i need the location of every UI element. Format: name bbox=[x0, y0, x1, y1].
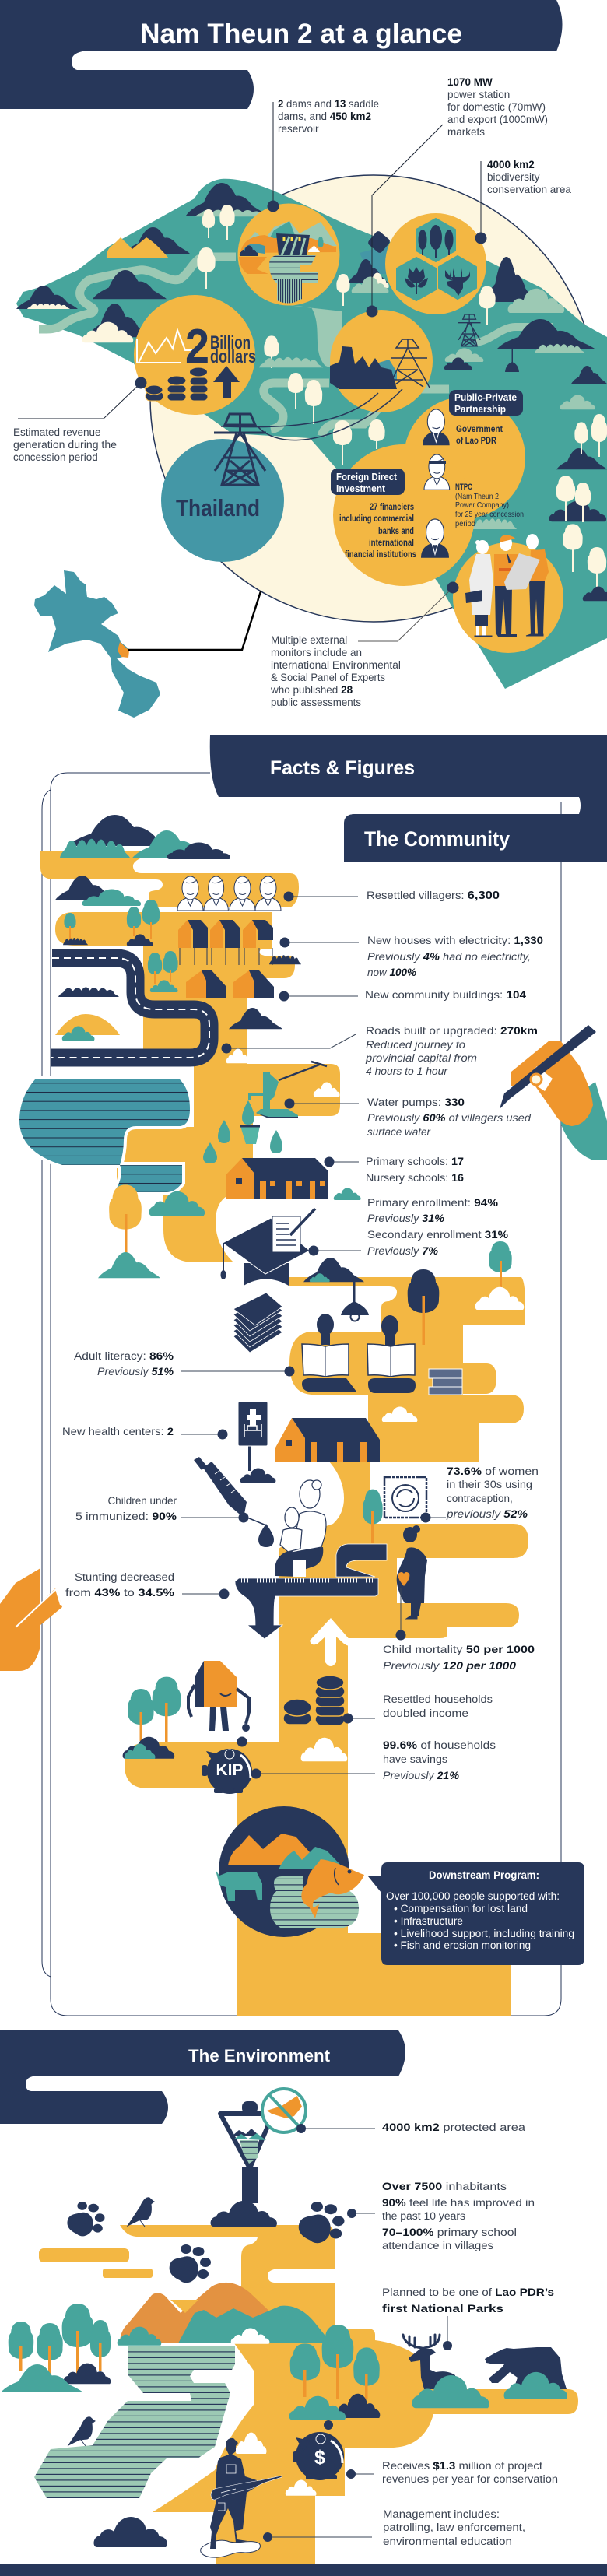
financiers label: banks and bbox=[378, 525, 414, 536]
icon: white cloud and leader line bbox=[301, 1738, 347, 1761]
icon: plan sheet bbox=[504, 553, 540, 590]
circle: downstream scene bbox=[216, 1806, 364, 1937]
NTPC label: (Nam Theun 2 bbox=[455, 492, 499, 501]
environment text: inhabitants: Over 7500 inhabitants bbox=[382, 2181, 496, 2192]
community text: water pumps: Water pumps: 330 bbox=[367, 1097, 462, 1108]
community text: roads: Roads built or upgraded: 270km bbox=[366, 1025, 533, 1037]
title: Nam Theun 2 at a glance bbox=[140, 19, 462, 49]
scenery: mountain, lamp and trees above readers bbox=[304, 1241, 524, 1345]
callout: downstream program bbox=[368, 1862, 584, 1965]
community text: stunting: Stunting decreased bbox=[75, 1571, 174, 1583]
community leader lines and dots bbox=[181, 892, 446, 1774]
circle: dams and reservoir bbox=[238, 204, 339, 305]
text: revenue: generation during the bbox=[13, 439, 117, 451]
road bbox=[51, 958, 209, 1058]
icon: tape measure bbox=[235, 1544, 387, 1639]
community text: electricity: New houses with electricity: 1,330 bbox=[367, 935, 540, 946]
community text: enrollment: Primary enrollment: 94% bbox=[367, 1197, 495, 1209]
footer bar bbox=[0, 2564, 607, 2576]
icon: deer head bbox=[445, 268, 470, 296]
community text: savings: Previously 21% bbox=[383, 1770, 458, 1781]
financiers label: financial institutions bbox=[345, 549, 416, 560]
community text: adult literacy: Previously 51% bbox=[97, 1366, 173, 1377]
striped river bbox=[34, 2346, 235, 2498]
icon: fish bbox=[301, 1859, 364, 1918]
government label bbox=[456, 423, 503, 446]
text: power station: power station bbox=[447, 89, 510, 100]
community text: contraception: contraception, bbox=[447, 1493, 513, 1504]
text: biodiversity: biodiversity bbox=[487, 171, 540, 183]
icon: KIP piggy bank bbox=[202, 1737, 261, 1794]
icon: stack of paper bbox=[233, 1293, 282, 1353]
community text: roads: 4 hours to 1 hour bbox=[366, 1065, 448, 1077]
trees centre bbox=[289, 2325, 380, 2420]
text: biodiversity: conservation area bbox=[487, 184, 571, 195]
text: power station: and export (1000mW) bbox=[447, 114, 548, 125]
environment text: national parks: first National Parks bbox=[382, 2303, 503, 2315]
circle: foreign direct investment bbox=[333, 444, 524, 586]
community text: electricity: now 100% bbox=[367, 967, 416, 978]
text: power station: markets bbox=[447, 126, 485, 138]
icon: up arrow bbox=[213, 366, 240, 398]
icon: mother and child bbox=[275, 1480, 326, 1577]
icon: cow bbox=[216, 1870, 262, 1901]
icon: small clouds near ranger bbox=[94, 2433, 317, 2547]
icon: woman in lab coat bbox=[465, 540, 493, 637]
community text: adult literacy: Adult literacy: 86% bbox=[74, 1350, 170, 1362]
trees left bbox=[1, 2304, 111, 2392]
icon: large pylon bbox=[214, 414, 266, 485]
community text: water pumps: Previously 60% of villagers used bbox=[367, 1112, 525, 1124]
icon: adults reading bbox=[302, 1314, 416, 1393]
environment text: management: Management includes: bbox=[383, 2508, 500, 2520]
community text: immunized: 5 immunized: 90% bbox=[75, 1511, 173, 1522]
financiers label bbox=[339, 501, 416, 560]
community text: contraception: in their 30s using bbox=[447, 1479, 532, 1490]
environment yellow ribbon bbox=[39, 2225, 578, 2564]
text: external monitors: & Social Panel of Experts bbox=[271, 672, 385, 683]
badge: public-private partnership bbox=[449, 390, 523, 416]
text: external monitors: who published 28 bbox=[271, 684, 353, 696]
clouds under animals bbox=[412, 2372, 567, 2408]
community text: income: Resettled households bbox=[383, 1693, 493, 1705]
icon: protected area sign bbox=[211, 2089, 306, 2227]
icon: white cloud bbox=[382, 1406, 417, 1422]
scenery: trees by houses bbox=[58, 900, 301, 1041]
icon: graduation cap with document bbox=[221, 1209, 315, 1286]
icon: hand holding pencil bbox=[500, 1025, 607, 1160]
scenery: mountains at top of community bbox=[55, 815, 230, 906]
circle: external monitors bbox=[453, 534, 563, 653]
circle: Thailand bbox=[161, 439, 284, 562]
community text: health centers: New health centers: 2 bbox=[62, 1426, 174, 1437]
map: Laos with project location bbox=[34, 570, 261, 718]
environment text: protected area: 4000 km2 protected area bbox=[382, 2122, 526, 2133]
community text: resettled villagers: Resettled villagers: 6,300 bbox=[367, 889, 500, 902]
badge: public-private partnership: Partnership bbox=[454, 403, 506, 415]
map scenery: rivers, mountains, trees bbox=[16, 183, 607, 601]
icon: no-touch symbol bbox=[262, 2089, 306, 2132]
text: revenue: concession period bbox=[13, 451, 98, 463]
callout: downstream program: • Compensation for lost land bbox=[394, 1903, 528, 1914]
small scene in sign bbox=[233, 2129, 266, 2164]
icon: syringe bbox=[194, 1457, 274, 1547]
icon: bear bbox=[485, 2347, 567, 2389]
circle: revenue two billion dollars: 2 bbox=[185, 320, 209, 374]
heading banner: the environment bbox=[0, 2030, 405, 2124]
heading: the community bbox=[344, 814, 607, 862]
environment leader lines and dots bbox=[263, 2124, 452, 2542]
icon: coin stacks bbox=[283, 1676, 353, 1725]
icon: park ranger bbox=[201, 2438, 282, 2557]
environment text: revenues: Receives $1.3 million of project bbox=[382, 2460, 535, 2472]
icon: smiling house figure bbox=[188, 1661, 250, 1732]
circle: Thailand: Thailand bbox=[176, 494, 260, 521]
icon: coins bbox=[146, 367, 208, 401]
icon: white up arrow bbox=[310, 1618, 352, 1666]
community text: schools: Primary schools: 17 bbox=[366, 1156, 463, 1167]
icon: health sign bbox=[238, 1402, 275, 1483]
community text: roads: provincial capital from bbox=[365, 1052, 477, 1064]
environment text: inhabitants: 70–100% primary school bbox=[382, 2227, 505, 2238]
icon: water pump bbox=[248, 1062, 340, 1118]
icon: row of new houses bbox=[178, 920, 273, 965]
environment text: revenues: revenues per year for conservation bbox=[382, 2473, 558, 2485]
icon: flower bbox=[405, 267, 428, 294]
government label: Government bbox=[456, 423, 503, 434]
community text: buildings: New community buildings: 104 bbox=[365, 989, 527, 1001]
community text: roads: Reduced journey to bbox=[366, 1039, 466, 1051]
icon: health center building bbox=[275, 1418, 380, 1462]
icon: dollar piggy bank: $ bbox=[314, 2447, 325, 2469]
community text: enrollment: Previously 31% bbox=[367, 1213, 443, 1224]
icon: deer bbox=[403, 2335, 455, 2389]
icon: KIP piggy bank: KIP bbox=[216, 1761, 244, 1779]
community text: savings: 99.6% of households bbox=[383, 1739, 486, 1751]
community text: stunting: from 43% to 34.5% bbox=[65, 1587, 168, 1599]
circle: biodiversity conservation bbox=[385, 213, 486, 314]
icon: tree and contraception packet bbox=[363, 1477, 426, 1543]
icon: small pylon bbox=[458, 314, 481, 346]
icon: financier bust bbox=[421, 519, 449, 558]
community text: child mortality: Child mortality 50 per 1000 bbox=[383, 1644, 523, 1655]
panel: teal map of the project area bbox=[16, 179, 607, 689]
text: dams: dams, and 450 km2 bbox=[278, 111, 371, 122]
text: external monitors: public assessments bbox=[271, 697, 361, 708]
text: power station: 1070 MW bbox=[447, 76, 493, 88]
icon: dollar piggy bank bbox=[293, 2432, 344, 2480]
community text: child mortality: Previously 120 per 1000 bbox=[383, 1660, 506, 1672]
text: biodiversity: 4000 km2 bbox=[487, 159, 535, 170]
badge: foreign direct investment: Foreign Direct bbox=[336, 471, 398, 483]
scenery: tree and clouds by school bbox=[98, 1184, 205, 1278]
financiers label: including commercial bbox=[339, 513, 414, 524]
icons: water drops and bucket bbox=[203, 1100, 282, 1163]
circle: power station bbox=[330, 310, 433, 412]
community text: electricity: Previously 4% had no electricity, bbox=[367, 951, 524, 963]
community text: immunized: Children under bbox=[107, 1495, 177, 1507]
callout: downstream program: • Infrastructure bbox=[394, 1915, 463, 1927]
text: dams: reservoir bbox=[278, 123, 319, 135]
financiers label: international bbox=[369, 537, 414, 548]
icon: left hand bbox=[0, 1568, 62, 1671]
callout: downstream program: Over 100,000 people supported with: bbox=[386, 1890, 560, 1902]
badge: public-private partnership: Public-Private bbox=[454, 391, 517, 403]
panel: cream backdrop circle bbox=[150, 175, 597, 622]
text: external monitors: monitors include an bbox=[271, 647, 362, 658]
lake: striped water bbox=[19, 1079, 190, 1192]
circle: revenue two billion dollars: dollars bbox=[210, 346, 256, 367]
circle: public-private partnership bbox=[404, 397, 525, 518]
icon: government bust bbox=[423, 409, 450, 445]
heading banner: the environment: The Environment bbox=[188, 2046, 331, 2065]
NTPC label: NTPC bbox=[455, 483, 472, 492]
community text: income: doubled income bbox=[383, 1707, 468, 1719]
header banner bbox=[0, 0, 562, 109]
callout: downstream program: • Livelihood support, including training bbox=[394, 1928, 574, 1939]
environment text: inhabitants: 90% feel life has improved in bbox=[382, 2197, 519, 2209]
NTPC label: for 25 year concession bbox=[455, 510, 524, 519]
callout: downstream program: • Fish and erosion monitoring bbox=[394, 1939, 531, 1951]
community text: contraception: 73.6% of women bbox=[447, 1465, 530, 1477]
text: external monitors: Multiple external bbox=[271, 634, 347, 646]
environment text: management: environmental education bbox=[383, 2536, 512, 2547]
icons: paw prints and birds bbox=[67, 2198, 344, 2446]
scenery: trees by house figure bbox=[123, 1677, 181, 1759]
community text: contraception: previously 52% bbox=[447, 1508, 525, 1520]
icon: NTPC bust bbox=[424, 454, 450, 490]
heading banner: facts and figures bbox=[210, 735, 607, 862]
heading: the community: The Community bbox=[364, 827, 510, 851]
heading banner: facts and figures: Facts & Figures bbox=[270, 757, 415, 779]
community text: savings: have savings bbox=[383, 1753, 447, 1765]
environment text: inhabitants: the past 10 years bbox=[382, 2210, 465, 2222]
connector dots and leader lines: top map bbox=[18, 102, 486, 641]
NTPC label bbox=[455, 483, 524, 528]
badge: foreign direct investment: Investment bbox=[336, 483, 386, 494]
icon: primary school bbox=[226, 1158, 361, 1200]
mountains bbox=[118, 2283, 325, 2346]
icon: trees bbox=[419, 225, 453, 258]
community text: schools: Nursery schools: 16 bbox=[366, 1172, 463, 1184]
icon: community buildings bbox=[186, 970, 274, 998]
text: revenue: Estimated revenue bbox=[13, 426, 101, 438]
NTPC label: Power Company) bbox=[455, 500, 509, 510]
badge: foreign direct investment bbox=[331, 469, 405, 495]
icon: pregnant woman bbox=[397, 1525, 427, 1619]
community text: water pumps: surface water bbox=[367, 1126, 431, 1138]
icon: four resettled villagers bbox=[177, 876, 281, 911]
environment text: inhabitants: attendance in villages bbox=[382, 2240, 493, 2251]
icon: book stack bbox=[429, 1369, 462, 1395]
icon: man in orange shirt bbox=[526, 534, 549, 636]
environment text: national parks: Planned to be one of Lao PDR’s bbox=[382, 2286, 547, 2298]
NTPC label: period bbox=[455, 519, 475, 528]
frame: facts and figures outline bbox=[51, 773, 561, 2016]
icon: white cloud by road bbox=[226, 1048, 250, 1063]
icon: man in hard hat bbox=[494, 535, 520, 637]
text: power station: for domestic (70mW) bbox=[447, 101, 546, 113]
community text: enrollment: Secondary enrollment 31% bbox=[367, 1229, 506, 1241]
circle: revenue two billion dollars: Billion bbox=[210, 332, 251, 353]
callout: downstream program: Downstream Program: bbox=[429, 1869, 539, 1881]
government label: of Lao PDR bbox=[456, 435, 496, 446]
text: dams: 2 dams and 13 saddle bbox=[278, 98, 380, 110]
text: external monitors: international Environmental bbox=[271, 659, 401, 671]
circle: revenue two billion dollars bbox=[134, 295, 256, 415]
community text: enrollment: Previously 7% bbox=[367, 1245, 437, 1257]
icon: transmission wires bbox=[221, 389, 402, 440]
community yellow ribbon bbox=[40, 851, 528, 2016]
environment text: management: patrolling, law enforcement, bbox=[383, 2522, 525, 2533]
financiers label: 27 financiers bbox=[370, 501, 414, 512]
